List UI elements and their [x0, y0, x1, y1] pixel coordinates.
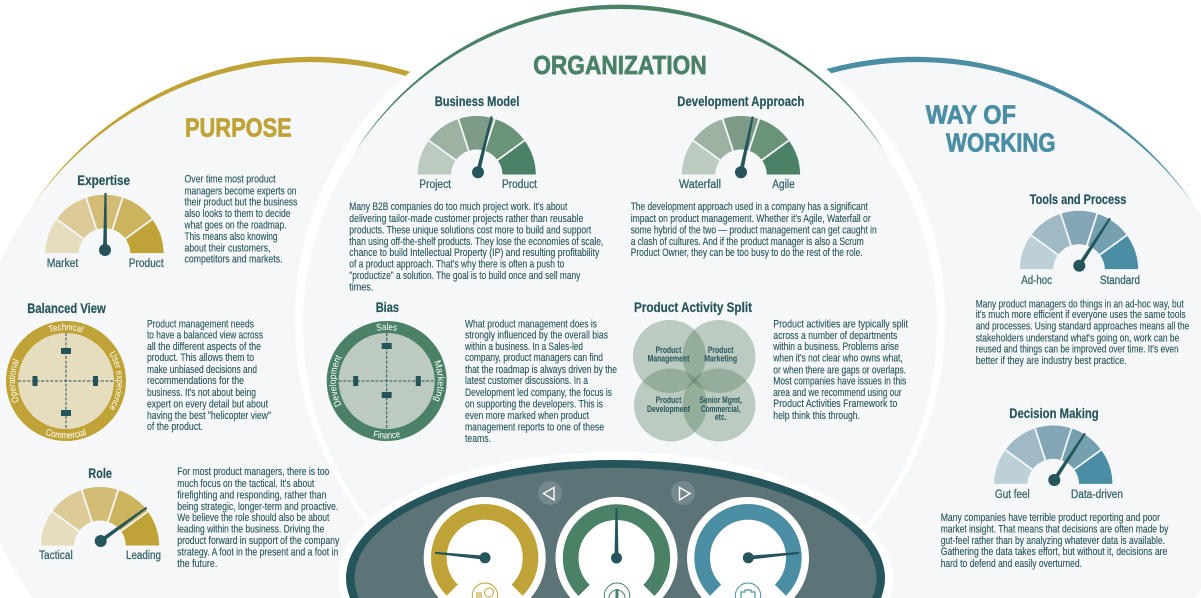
gauge: business model: Product [502, 179, 538, 191]
dial: way of working [687, 497, 809, 598]
text: balanced view: expert on every detail but about [147, 398, 268, 410]
text: expertise: This means also knowing [184, 231, 278, 243]
text: balanced view: product. This allows them to [147, 352, 254, 364]
text: expertise: about their customers, [184, 242, 270, 254]
venn: product activity split: Development [647, 404, 690, 414]
icon: right arrow button [671, 481, 695, 505]
gauge: business model: Project [419, 179, 452, 191]
text: product activity split: across a number of departments [773, 330, 898, 342]
radar: balanced view: Technical [48, 323, 84, 332]
gauge: role: Leading [126, 550, 161, 562]
text: bias: on supporting the developers. This is [465, 398, 603, 410]
text: expertise: also looks to them to decide [184, 208, 290, 220]
gauge: business model: Business Model [435, 94, 519, 109]
dashboard [338, 452, 893, 598]
text: balanced view: Product management needs [147, 318, 254, 330]
text: development approach: Product Owner, they can be too busy to do the rest of the role. [631, 247, 863, 259]
text: product activity split: within a business. Problems arise [773, 341, 899, 353]
text: product activity split: when it's not clear who owns what, [773, 352, 903, 364]
heading: way of working [926, 99, 1056, 158]
heading: purpose: PURPOSE [185, 113, 292, 143]
text: role: leading within the business. Driving the [177, 524, 324, 536]
text: role: strategy. A foot in the present and a foot in [177, 546, 338, 558]
radar: balanced view: User experience [110, 350, 123, 410]
text: business model: Many B2B companies do too much project work. It's about [349, 201, 567, 213]
gauge: development approach: Agile [772, 179, 795, 191]
gauge: role: Role [88, 466, 112, 481]
text: development approach: The development approach used in a company has a significant [631, 201, 868, 213]
text: business model: of a product approach. That's why there is often a push to [349, 258, 564, 270]
text: tools and process: better if they are industry best practice. [976, 355, 1127, 367]
text: business model [349, 201, 603, 294]
text: expertise: managers become experts on [184, 186, 296, 198]
venn: product activity split [633, 300, 756, 442]
gauge: tools and process [1019, 192, 1140, 287]
dial: purpose [424, 497, 546, 598]
text: balanced view: business. It's not about being [147, 387, 256, 399]
venn: product activity split: Commercial, [701, 404, 741, 414]
gauge: decision making [993, 406, 1123, 501]
text: expertise: what goes on the roadmap. [184, 220, 286, 232]
text: tools and process [976, 298, 1189, 367]
text: bias [464, 318, 617, 445]
text: bias: strongly influenced by the overall bias [465, 330, 608, 342]
text: balanced view: recommendations for the [147, 375, 244, 387]
text: role: firefighting and responding, rather than [177, 490, 326, 502]
text: development approach: a clash of cultures. And if the product manager is also a Scrum [631, 236, 864, 248]
text: bias: What product management does is [465, 318, 597, 330]
text: bias: teams. [465, 433, 491, 445]
text: business model: chance to build Intellectual Property (IP) and resulting profitability [349, 247, 600, 259]
text: role: much focus on the tactical. It's about [177, 478, 314, 490]
venn: product activity split: Senior Mgmt, [700, 395, 742, 405]
text: business model: delivering tailor-made customer projects rather than reusable [349, 213, 583, 225]
heading: organization: ORGANIZATION [533, 50, 707, 80]
text: decision making: hard to defend and easily overturned. [941, 558, 1082, 570]
panel: organization [295, 0, 945, 598]
gauge: tools and process: Tools and Process [1030, 192, 1126, 207]
text: product activity split: help think this through. [773, 410, 860, 422]
radar: bias [326, 300, 447, 441]
gauge: tools and process: Ad-hoc [1021, 275, 1052, 287]
text: balanced view: make unbiased decisions and [147, 364, 257, 376]
text: product activity split: or when there are gaps or overlaps. [773, 364, 906, 376]
text: role: being strategic, longer-term and proactive. [177, 501, 338, 513]
heading: way of working: WORKING [946, 128, 1056, 158]
venn: product activity split: Management [648, 354, 689, 364]
text: role: For most product managers, there is too [177, 466, 329, 478]
venn: product activity split: Product [656, 345, 681, 355]
text: balanced view: all the different aspects of the [147, 341, 261, 353]
panel: way of working [576, 57, 1201, 598]
gauge: role: Tactical [39, 550, 73, 562]
text: product activity split: Product Activities Framework to [773, 398, 897, 410]
text: expertise: Over time most product [184, 174, 276, 186]
venn: product activity split: Product Activity Split [634, 300, 752, 315]
text: bias: within a business. In a Sales-led [464, 341, 583, 353]
text: role: We believe the role should also be about [177, 512, 329, 524]
text: bias: company, product managers can find [465, 352, 603, 364]
gauge: business model [417, 94, 538, 191]
text: bias: Development led company, the focus is [465, 387, 612, 399]
dial: organization [556, 497, 677, 598]
text: role: the future. [177, 558, 217, 570]
venn: product activity split: Marketing [704, 354, 737, 364]
gauge: development approach: Development Approach [677, 94, 804, 109]
text: bias: management reports to one of these [465, 422, 604, 434]
gauge: decision making: Decision Making [1009, 406, 1099, 421]
text: expertise: competitors and markets. [184, 254, 282, 266]
gauge: decision making: Gut feel [995, 489, 1030, 501]
text: business model: "productize" a solution. The goal is to build once and sell many [349, 270, 581, 282]
radar: balanced view: Commercial [46, 428, 86, 438]
gauge: role [39, 466, 161, 562]
gauge: expertise: Product [129, 258, 164, 270]
text: role [177, 466, 340, 570]
text: bias: that the roadmap is always driven by the [465, 364, 617, 376]
text: bias: even more marked when product [465, 410, 589, 422]
radar: bias: Sales [376, 323, 397, 331]
panel: purpose [0, 57, 650, 598]
gauge: expertise: Expertise [77, 173, 130, 188]
radar: balanced view: Operational [8, 358, 19, 403]
text: development approach [631, 201, 877, 259]
text: product activity split [773, 318, 908, 422]
venn: product activity split: etc. [715, 412, 727, 422]
gauge: decision making: Data-driven [1071, 489, 1123, 501]
heading: way of working: WAY OF [926, 99, 1016, 129]
radar: balanced view [6, 301, 126, 441]
text: balanced view [147, 318, 271, 433]
text: balanced view: to have a balanced view across [147, 330, 263, 342]
text: business model: products. These unique solutions cost more to build and support [349, 224, 591, 236]
radar: bias: Bias [376, 300, 399, 315]
text: product activity split: Product activities are typically split [773, 318, 908, 330]
radar: bias: Development [329, 354, 342, 408]
venn: product activity split: Product [708, 345, 734, 355]
text: expertise [184, 174, 298, 266]
gauge: tools and process: Standard [1100, 275, 1140, 287]
radar: balanced view: Balanced View [27, 301, 106, 316]
text: development approach: impact on product management. Whether it's Agile, Waterfall or [631, 213, 871, 225]
icon: left arrow button [538, 481, 562, 505]
text: bias: latest customer discussions. In a [465, 375, 588, 387]
text: balanced view: of the product. [147, 421, 203, 433]
gauge: development approach: Waterfall [679, 179, 721, 191]
gauge: expertise: Market [47, 258, 79, 270]
gauge: development approach [677, 94, 804, 191]
text: product activity split: Most companies have issues in this [773, 376, 907, 388]
text: role: product forward in support of the company [177, 535, 340, 547]
text: expertise: their product but the business [184, 196, 298, 208]
text: business model: than using off-the-shelf products. They lose the economies of scale, [349, 236, 603, 248]
text: product activity split: area and we recommend using our [773, 387, 902, 399]
radar: bias: Finance [374, 430, 400, 439]
text: business model: times. [349, 282, 373, 294]
radar: bias: Marketing [432, 360, 445, 402]
text: development approach: some hybrid of the two — product management can get caught in [631, 224, 877, 236]
gauge: expertise [44, 173, 164, 270]
text: decision making [941, 512, 1169, 570]
venn: product activity split: Product [656, 395, 681, 405]
text: balanced view: having the best "helicopter view" [147, 410, 271, 422]
